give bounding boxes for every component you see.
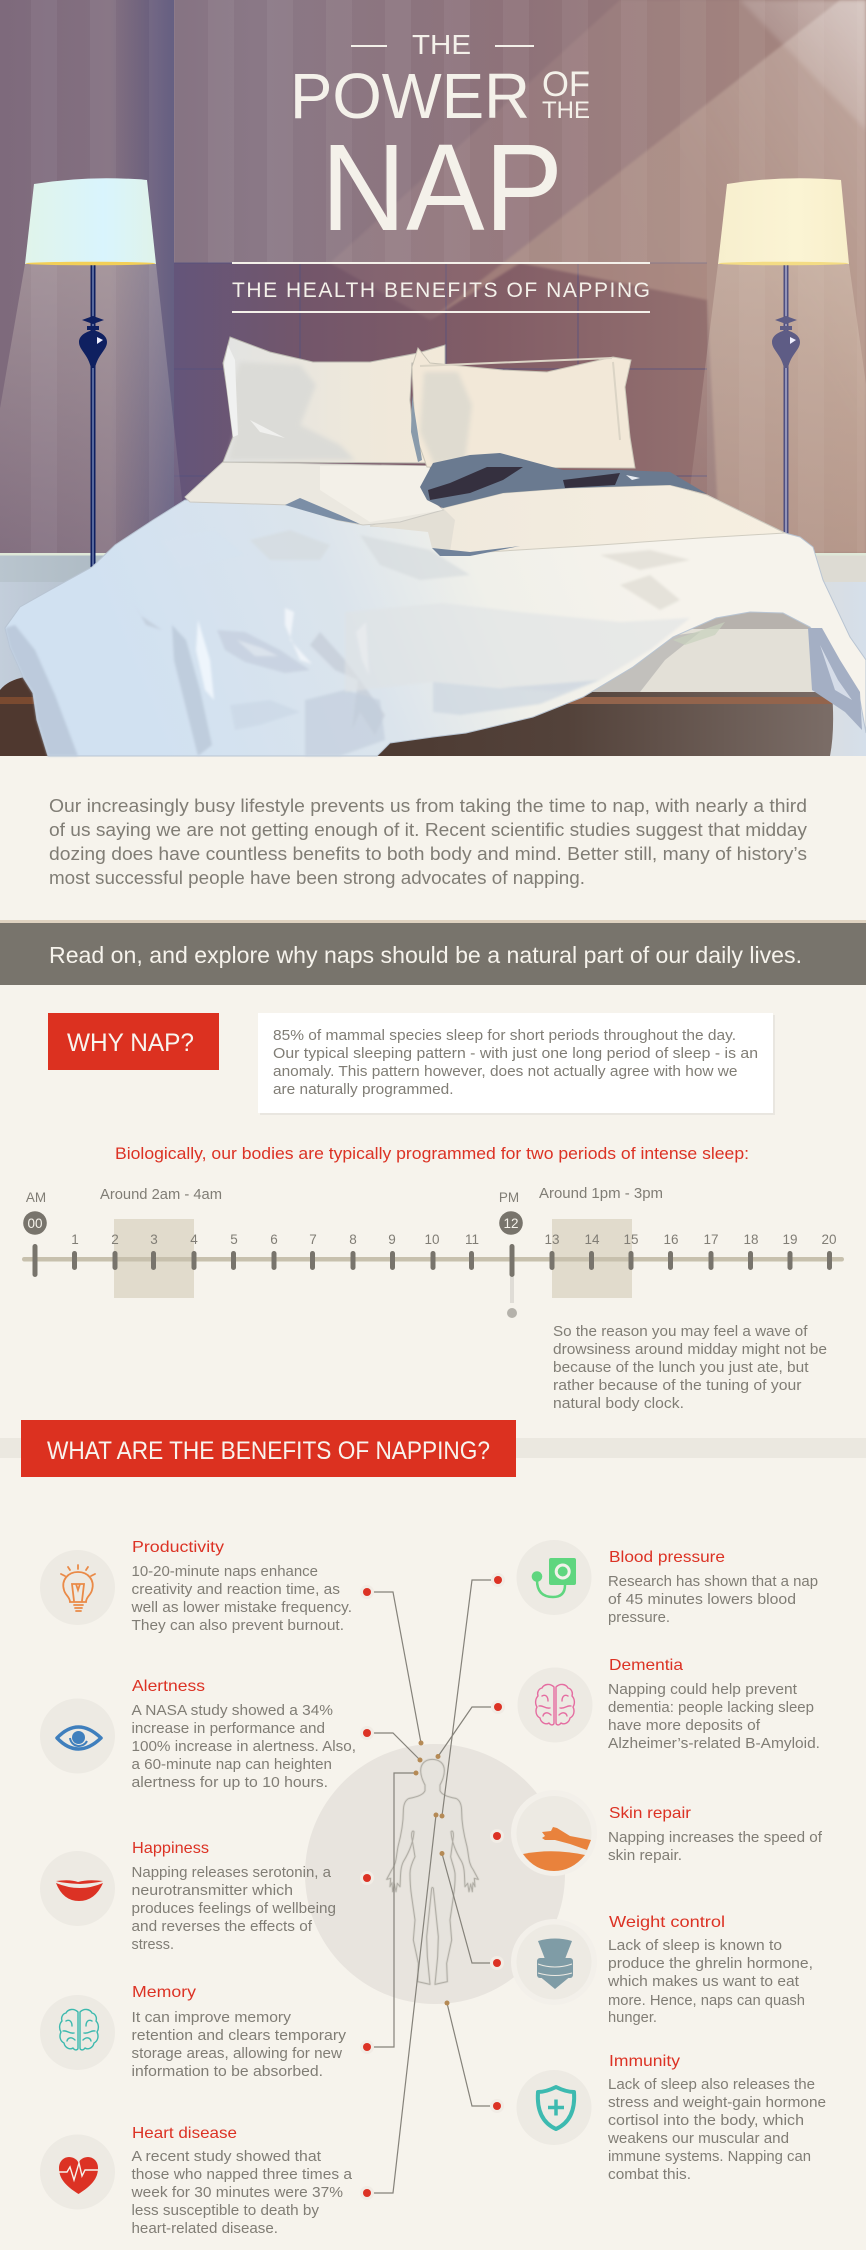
mattress	[590, 612, 812, 692]
bed frame	[0, 677, 833, 756]
intro paragraph	[49, 795, 808, 888]
description: immune systems. Napping can	[608, 2149, 811, 2165]
heading: Memory	[132, 1984, 196, 2001]
description: dementia: people lacking sleep	[608, 1700, 814, 1716]
description: 10-20-minute naps enhance	[132, 1564, 318, 1580]
hour labels: 13	[544, 1232, 560, 1247]
timeline chart	[22, 1186, 844, 1318]
description: Napping increases the speed of	[608, 1830, 823, 1846]
hour labels: 14	[584, 1232, 600, 1247]
description: stress and weight-gain hormone	[608, 2095, 826, 2111]
description	[608, 1830, 823, 1864]
description: pressure.	[608, 1610, 670, 1626]
icon: smiling lips	[40, 1851, 115, 1926]
AM marker	[23, 1190, 47, 1235]
red statement: Biologically, our bodies are typically programmed for two periods of intense sleep:	[115, 1145, 749, 1163]
heading: Productivity	[132, 1539, 224, 1556]
hour labels: 15	[623, 1232, 639, 1247]
right pillow	[411, 348, 635, 468]
description: creativity and reaction time, as	[132, 1582, 340, 1598]
description: have more deposits of	[608, 1718, 761, 1734]
description: alertness for up to 10 hours.	[132, 1775, 328, 1791]
description: a 60-minute nap can heighten	[132, 1757, 332, 1773]
description: produces feelings of wellbeing	[132, 1901, 336, 1917]
heading: Weight control	[609, 1914, 725, 1931]
title line: THE: THE	[412, 29, 471, 60]
description	[132, 1703, 356, 1791]
heading: Immunity	[609, 2053, 680, 2070]
description: A recent study showed that	[132, 2149, 321, 2165]
hour labels: 20	[821, 1232, 837, 1247]
hour labels: 7	[309, 1232, 317, 1247]
description: and reverses the effects of	[132, 1919, 313, 1935]
hour labels: 17	[703, 1232, 719, 1247]
description: increase in performance and	[132, 1721, 325, 1737]
left lamp	[0, 178, 188, 567]
description: A NASA study showed a 34%	[132, 1703, 333, 1719]
body diagram	[305, 1573, 597, 2200]
PM marker: 12	[503, 1216, 519, 1231]
heading: why nap: WHY NAP?	[67, 1029, 194, 1057]
intro paragraph: dozing does have countless benefits to both body and mind. Better still, many of history’s	[49, 843, 807, 864]
hour labels: 1	[71, 1232, 79, 1247]
band: read on: Read on, and explore why naps should be a natural part of our daily lives.	[49, 942, 802, 968]
icon: brain	[518, 1668, 592, 1742]
intro paragraph: Our increasingly busy lifestyle prevents us from taking the time to nap, with nearly a third	[49, 795, 807, 816]
description: information to be absorbed.	[132, 2064, 323, 2080]
weight control icon halo	[511, 1919, 597, 2005]
description: stress.	[132, 1937, 174, 1953]
description: which makes us want to eat	[607, 1974, 799, 1990]
text card: why nap	[258, 1013, 775, 1115]
benefit: skin repair	[516, 1796, 823, 1871]
headboard	[174, 263, 707, 553]
body point markers	[414, 1740, 450, 2006]
benefit: productivity	[40, 1539, 352, 1634]
duvet underside highlight	[820, 645, 852, 700]
sunlight beams	[330, 0, 866, 553]
hour labels: 4	[190, 1232, 198, 1247]
AM marker: AM	[26, 1190, 46, 1205]
description: produce the ghrelin hormone,	[608, 1956, 813, 1972]
hour labels: 3	[150, 1232, 158, 1247]
description: storage areas, allowing for new	[132, 2046, 343, 2062]
heading: why nap	[48, 1013, 219, 1070]
description	[132, 1865, 336, 1953]
title line: POWER OF THE: POWER	[290, 60, 530, 132]
description: weakens our muscular and	[607, 2131, 789, 2147]
description: They can also prevent burnout.	[132, 1618, 344, 1634]
period label: 1pm to 3pm: Around 1pm - 3pm	[539, 1186, 663, 1202]
PM marker	[499, 1190, 523, 1235]
description: week for 30 minutes were 37%	[130, 2185, 343, 2201]
timeline note	[553, 1323, 827, 1412]
section heading: benefits	[0, 1420, 866, 1477]
description: hunger.	[608, 2010, 657, 2026]
hour labels: 2	[111, 1232, 119, 1247]
intro paragraph: most successful people have been strong advocates of napping.	[49, 867, 585, 888]
description: Lack of sleep also releases the	[608, 2077, 815, 2093]
title	[232, 29, 650, 313]
benefit: alertness	[40, 1678, 356, 1791]
heading: Happiness	[132, 1840, 209, 1857]
duvet shadow folds	[5, 530, 690, 756]
benefit: heart disease	[40, 2125, 353, 2237]
skin repair icon halo	[511, 1790, 597, 1876]
hour labels: 6	[270, 1232, 278, 1247]
connector lines	[367, 1580, 498, 2193]
midday pointer	[507, 1277, 517, 1318]
AM marker: 00	[27, 1216, 43, 1231]
hour labels: 8	[349, 1232, 357, 1247]
description	[130, 1564, 352, 1634]
description: cortisol into the body, which	[608, 2113, 804, 2129]
band: read on	[0, 920, 866, 985]
timeline note: natural body clock.	[553, 1395, 684, 1412]
subtitle: THE HEALTH BENEFITS OF NAPPING	[232, 279, 650, 302]
benefit: weight control	[516, 1914, 813, 2026]
heading: Dementia	[609, 1657, 683, 1674]
description	[132, 2010, 347, 2080]
description: Napping could help prevent	[608, 1682, 797, 1698]
benefit: blood pressure	[516, 1540, 818, 1626]
left pillow	[223, 337, 445, 463]
hour labels: 5	[230, 1232, 238, 1247]
benefit: happiness	[40, 1840, 336, 1953]
heading: Skin repair	[609, 1805, 692, 1822]
duvet underside fold	[808, 628, 862, 730]
description: more. Hence, naps can quash	[608, 1993, 805, 2009]
description: heart-related disease.	[132, 2221, 278, 2237]
human figure	[387, 1759, 478, 1984]
mattress reflection	[673, 622, 725, 645]
description: It can improve memory	[132, 2010, 292, 2026]
text card: why nap: Our typical sleeping pattern - with just one long period of sleep - is an	[273, 1045, 758, 1062]
red connector dots	[360, 1573, 505, 2200]
hour labels	[71, 1232, 837, 1247]
hour labels: 18	[743, 1232, 759, 1247]
icon: brain	[40, 1995, 115, 2070]
sleep period highlights	[114, 1219, 632, 1298]
text card: why nap: anomaly. This pattern however, does not actually agree with how we	[273, 1063, 738, 1080]
hour labels: 9	[388, 1232, 396, 1247]
description	[130, 2149, 353, 2237]
folded top of duvet	[370, 485, 785, 556]
description	[607, 2077, 826, 2183]
description: 100% increase in alertness. Also,	[132, 1739, 356, 1755]
icon: heart with pulse	[40, 2134, 115, 2210]
intro paragraph: of us saying we are not getting enough of it. Recent scientific studies suggest that midday	[49, 819, 808, 840]
description: less susceptible to death by	[132, 2203, 320, 2219]
axis	[22, 1257, 844, 1262]
description: retention and clears temporary	[132, 2028, 347, 2044]
description: neurotransmitter which	[132, 1883, 293, 1899]
title line: POWER OF THE: OF	[542, 65, 590, 104]
icon: light bulb	[40, 1550, 115, 1625]
sheet under the pillows	[185, 462, 443, 525]
description: those who napped three times a	[132, 2167, 353, 2183]
wall	[0, 0, 866, 553]
icon: waist with tape measure	[516, 1924, 592, 2000]
section heading: benefits: WHAT ARE THE BENEFITS OF NAPPING?	[47, 1437, 490, 1465]
description: well as lower mistake frequency.	[130, 1600, 352, 1616]
icon: blood pressure cuff	[516, 1540, 592, 1615]
heading: Blood pressure	[609, 1549, 725, 1566]
dark throw blanket	[420, 453, 707, 508]
description: Research has shown that a nap	[608, 1574, 818, 1590]
baseboard and floor	[0, 553, 866, 756]
description: combat this.	[608, 2167, 691, 2183]
description: Napping releases serotonin, a	[132, 1865, 332, 1881]
title line: POWER OF THE: THE	[542, 97, 590, 124]
text card: why nap: are naturally programmed.	[273, 1081, 454, 1098]
timeline note: drowsiness around midday might not be	[553, 1341, 827, 1358]
benefit: immunity	[516, 2053, 826, 2183]
heading: Alertness	[132, 1678, 205, 1695]
icon: shield with cross	[516, 2070, 592, 2145]
duvet	[5, 495, 866, 756]
corner glow	[740, 0, 866, 130]
background circle	[305, 1744, 565, 2004]
title line: NAP: NAP	[321, 120, 563, 257]
PM marker: PM	[499, 1190, 519, 1205]
timeline note: because of the lunch you just ate, but	[553, 1359, 809, 1376]
icon: eye	[40, 1698, 115, 1774]
description: Lack of sleep is known to	[608, 1938, 782, 1954]
timeline note: rather because of the tuning of your	[553, 1377, 802, 1394]
hour labels: 11	[465, 1232, 479, 1247]
hero illustration: bedroom	[0, 0, 866, 756]
hour labels: 16	[663, 1232, 679, 1247]
description	[608, 1682, 820, 1752]
right lamp	[682, 178, 866, 553]
ticks	[32, 1244, 832, 1277]
period label: 2am to 4am: Around 2am - 4am	[100, 1187, 222, 1203]
benefit: dementia	[518, 1657, 820, 1752]
description	[608, 1574, 818, 1626]
description: skin repair.	[608, 1848, 682, 1864]
text card: why nap: 85% of mammal species sleep for short periods throughout the day.	[273, 1027, 736, 1044]
heading: Heart disease	[132, 2125, 237, 2142]
description: of 45 minutes lowers blood	[608, 1592, 796, 1608]
hour labels: 19	[782, 1232, 798, 1247]
icon: arm and body	[516, 1796, 592, 1871]
hour labels: 10	[424, 1232, 440, 1247]
benefit: memory	[40, 1984, 347, 2080]
timeline note: So the reason you may feel a wave of	[553, 1323, 808, 1340]
description	[607, 1938, 813, 2026]
description: Alzheimer’s-related B-Amyloid.	[608, 1736, 820, 1752]
